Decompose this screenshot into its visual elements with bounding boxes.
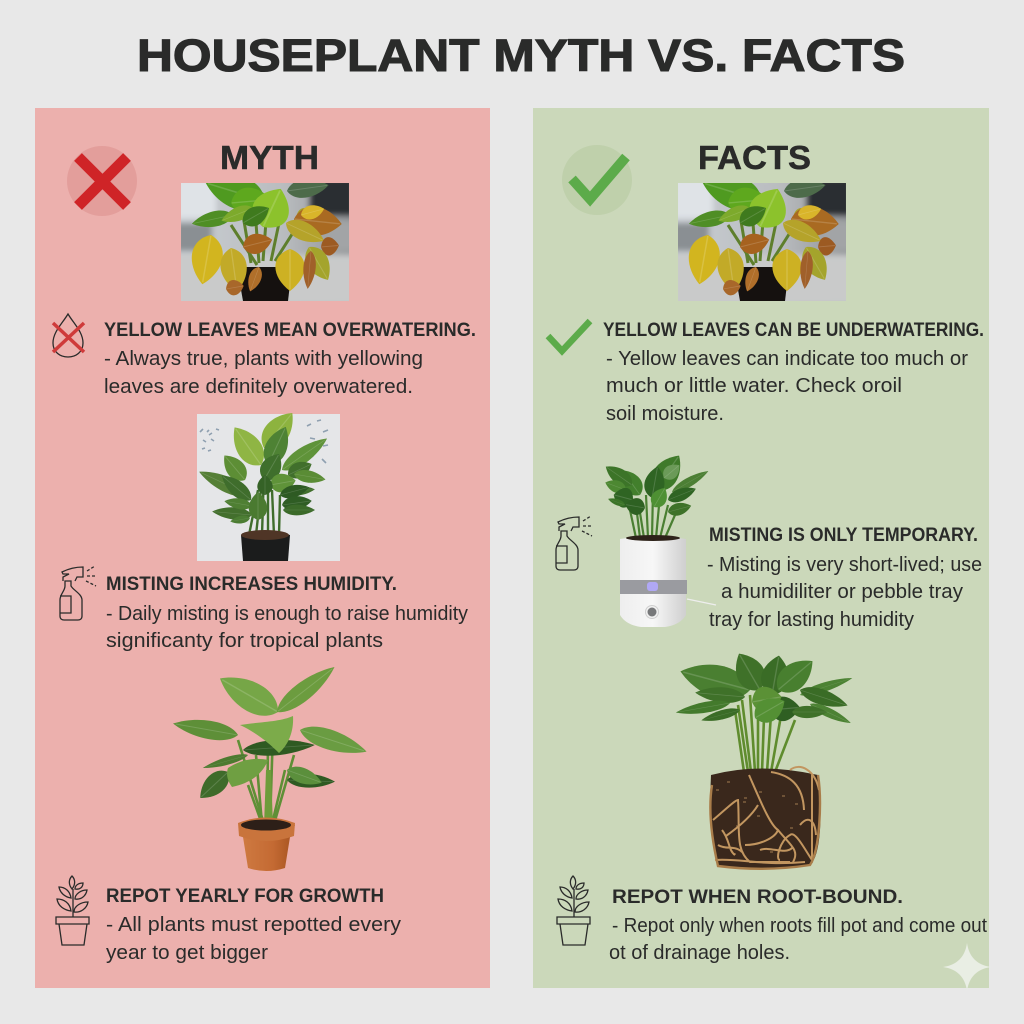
title: HOUSEPLANT MYTH VS. FACTS [137,30,905,81]
fact 1 text: much or little water. Check oroil [606,375,902,397]
myth 3 text: REPOT YEARLY FOR GROWTH [106,886,384,907]
fact 2 text: a humidiliter or pebble tray [721,581,963,603]
fact 2 text [707,525,982,631]
myth 3 text: year to get bigger [106,942,268,964]
myth 2 text: MISTING INCREASES HUMIDITY. [106,574,397,595]
panel: facts [533,108,989,988]
icon: spray bottle [60,566,96,620]
icon: sparkle mark [943,943,991,991]
icon: green check [548,321,590,351]
photo: misted plant in black pot [196,405,340,561]
fact 3 text: - Repot only when roots fill pot and come out [612,915,987,937]
myth 1 text: YELLOW LEAVES MEAN OVERWATERING. [104,320,476,341]
icon: potted plant outline [56,876,89,945]
fact 3 text: REPOT WHEN ROOT-BOUND. [612,887,903,908]
myth 3 text: - All plants must repotted every [106,914,401,936]
illustration: potted plant in terracotta pot [171,660,370,871]
facts heading: FACTS [698,139,811,176]
icon: crossed water drop [53,314,84,357]
icon: spray bottle [556,516,592,570]
myth 1 text [104,320,476,398]
fact 2 text: - Misting is very short-lived; use [707,554,982,576]
fact 3 text: ot of drainage holes. [609,942,790,964]
illustration: plant in humidifier [601,449,716,627]
myth 2 text: significanty for tropical plants [106,630,383,652]
fact 2 text: tray for lasting humidity [709,609,914,631]
myth 1 text: - Always true, plants with yellowing [104,348,423,370]
myth 1 text: leaves are definitely overwatered. [104,376,413,398]
icon: potted plant outline [557,876,590,945]
fact 1 text: - Yellow leaves can indicate too much or [606,348,968,370]
fact 1 text [603,320,984,425]
fact 2 text: MISTING IS ONLY TEMPORARY. [709,525,978,546]
fact 1 text: YELLOW LEAVES CAN BE UNDERWATERING. [603,320,984,341]
panel: myth [35,108,490,988]
icon: green check badge [562,145,632,215]
photo: plant with yellowing leaves [673,167,853,308]
myth 3 text [106,886,401,964]
myth 2 text: - Daily misting is enough to raise humidity [106,603,468,625]
illustration: plant with exposed roots [675,647,854,869]
photo: plant with yellowing leaves [176,167,356,308]
icon: red cross badge [67,146,137,216]
myth heading: MYTH [220,139,319,176]
fact 3 text [609,887,987,964]
fact 1 text: soil moisture. [606,403,724,425]
myth 2 text [106,574,468,652]
